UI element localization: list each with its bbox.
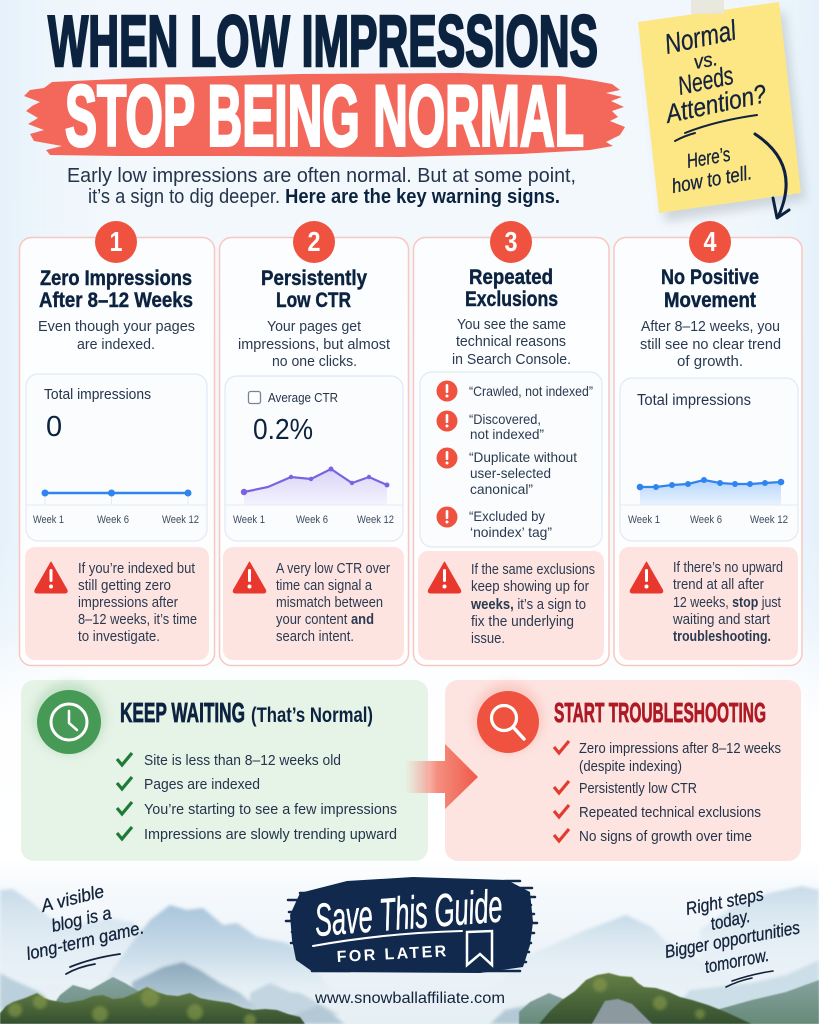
- line chart: flat impressions: Week 6: [690, 514, 722, 526]
- description: [452, 316, 571, 368]
- badge 2: 2: [308, 226, 320, 257]
- intro text: [67, 165, 576, 208]
- line chart: total impressions zero: 0: [46, 411, 62, 443]
- left handwritten note: blog is a: [49, 903, 113, 936]
- arrow: waiting to troubleshooting: [405, 744, 478, 809]
- panel: card 2: [220, 221, 408, 666]
- right handwritten note: tomorrow.: [703, 945, 771, 977]
- callout: impressions after: [78, 595, 178, 611]
- left handwritten note: A visible: [38, 881, 106, 916]
- callout: your content and: [276, 612, 374, 628]
- badge 2: [293, 221, 335, 263]
- callout: weeks, it’s a sign to: [470, 597, 586, 613]
- callout: [619, 547, 798, 660]
- line chart: average CTR: [225, 376, 403, 541]
- heading: KEEP WAITING: [120, 697, 245, 728]
- description: no one clicks.: [272, 353, 357, 370]
- icon: warning: [35, 562, 67, 593]
- heading: Exclusions: [465, 287, 558, 311]
- badge 1: 1: [110, 226, 122, 257]
- icon: warning: [233, 562, 266, 593]
- icon: alert: [436, 448, 458, 468]
- line chart: average CTR: 0.2%: [253, 414, 313, 446]
- description: technical reasons: [456, 333, 566, 350]
- callout: to investigate.: [78, 629, 160, 645]
- panel: start troubleshooting: [445, 680, 801, 861]
- heading: Movement: [664, 288, 756, 312]
- note handwriting: how to tell.: [670, 162, 754, 198]
- callout: [223, 547, 404, 660]
- exclusions list: “Crawled, not indexed”: [469, 383, 593, 399]
- save this guide brush banner: [286, 877, 537, 973]
- badge 1: [95, 221, 137, 263]
- icon: alert: [436, 506, 458, 528]
- callout: issue.: [471, 631, 505, 647]
- line chart: average CTR: Week 1: [233, 514, 265, 526]
- badge 3: [490, 221, 532, 263]
- callout: trend at all after: [673, 577, 764, 593]
- exclusions list: “Duplicate without: [469, 449, 577, 465]
- exclusions list: not indexed”: [470, 426, 544, 442]
- callout: troubleshooting.: [673, 629, 771, 645]
- note handwriting: [661, 14, 769, 198]
- heading: Low CTR: [276, 288, 351, 312]
- description: [640, 318, 781, 370]
- website url: www.snowballaffiliate.com: [314, 990, 505, 1007]
- badge 3: 3: [504, 226, 518, 257]
- exclusions list: “Discovered,: [469, 411, 541, 427]
- left handwritten note: [24, 881, 146, 974]
- icon: bookmark: [467, 931, 492, 965]
- checklist: [554, 740, 781, 845]
- callout: fix the underlying: [471, 614, 574, 630]
- icon: alert: [436, 380, 458, 402]
- description: impressions, but almost: [238, 336, 391, 353]
- note handwriting: Normal: [662, 14, 739, 60]
- description: in Search Console.: [452, 351, 571, 368]
- save this guide brush banner: Save This Guide: [313, 879, 504, 946]
- icon: clock: [33, 682, 105, 754]
- panel: keep waiting: [21, 680, 428, 861]
- note handwriting: Here’s: [685, 144, 732, 173]
- checklist: Zero impressions after 8–12 weeks: [579, 740, 781, 757]
- line chart: total impressions zero: Week 1: [33, 514, 64, 526]
- tape: [691, 0, 724, 14]
- icon: alert: [436, 410, 458, 432]
- icon: warning: [428, 562, 461, 593]
- exclusions list: user-selected: [470, 465, 551, 481]
- checklist: You’re starting to see a few impressions: [144, 801, 397, 818]
- right handwritten note: Right steps: [684, 884, 765, 919]
- icon: magnifier: [473, 683, 543, 753]
- mountain landscape: [0, 886, 819, 1024]
- heading: [39, 266, 193, 312]
- line chart: total impressions zero: Week 12: [162, 514, 199, 526]
- exclusions list: [420, 372, 602, 547]
- line chart: average CTR: Week 6: [296, 514, 328, 526]
- checklist: Impressions are slowly trending upward: [144, 826, 397, 843]
- callout: 8–12 weeks, it’s time: [78, 612, 197, 628]
- checklist: Persistently low CTR: [579, 780, 697, 797]
- panel: card 1: [20, 221, 214, 666]
- checklist: No signs of growth over time: [579, 828, 752, 845]
- line chart: flat impressions: Week 1: [628, 514, 660, 526]
- checklist: Site is less than 8–12 weeks old: [144, 752, 341, 769]
- note handwriting: Attention?: [661, 78, 769, 129]
- heading: No Positive: [661, 265, 759, 289]
- description: still see no clear trend: [640, 336, 781, 353]
- exclusions list: “Excluded by: [469, 508, 545, 524]
- line chart: total impressions zero: [26, 374, 207, 541]
- callout: If the same exclusions: [471, 562, 595, 578]
- intro text: Early low impressions are often normal. But at some point,: [67, 165, 576, 187]
- callout: [418, 551, 604, 660]
- right handwritten note: [663, 884, 801, 987]
- exclusions list: ‘noindex’ tag”: [470, 524, 552, 540]
- checklist: (despite indexing): [579, 758, 682, 775]
- note handwriting: Needs: [675, 60, 736, 101]
- intro text: it’s a sign to dig deeper. Here are the key warning signs.: [88, 186, 560, 208]
- checklist: Pages are indexed: [144, 776, 260, 793]
- line chart: total impressions zero: Total impressions: [44, 387, 151, 403]
- checklist: [117, 752, 397, 843]
- right handwritten note: today.: [709, 906, 752, 934]
- callout: [25, 547, 209, 660]
- line chart: flat impressions: Total impressions: [637, 392, 751, 409]
- heading: Repeated: [469, 265, 553, 289]
- callout: waiting and start: [672, 612, 770, 628]
- badge 4: 4: [704, 226, 717, 257]
- callout: search intent.: [276, 629, 354, 645]
- callout: 12 weeks, stop just: [673, 595, 781, 611]
- description: Your pages get: [267, 318, 362, 335]
- line chart: total impressions zero: Week 6: [97, 514, 129, 526]
- description: You see the same: [457, 316, 566, 333]
- left handwritten note: long-term game.: [24, 917, 146, 964]
- callout: mismatch between: [276, 595, 383, 611]
- callout: time can signal a: [276, 578, 373, 594]
- arrow from sticky note: [755, 134, 789, 218]
- exclusions list: canonical”: [470, 481, 533, 497]
- heading: [465, 265, 558, 311]
- description: [38, 318, 195, 353]
- sticky note: [638, 0, 806, 222]
- description: After 8–12 weeks, you: [641, 318, 780, 335]
- description: are indexed.: [77, 336, 155, 353]
- description: Even though your pages: [38, 318, 195, 335]
- save this guide brush banner: FOR LATER: [336, 943, 449, 966]
- heading: After 8–12 Weeks: [39, 288, 193, 312]
- heading: [261, 266, 367, 312]
- heading: Zero Impressions: [40, 266, 192, 290]
- callout: If there’s no upward: [673, 560, 783, 576]
- badge 4: [689, 221, 731, 263]
- callout: If you’re indexed but: [78, 561, 195, 577]
- line chart: average CTR: Average CTR: [268, 391, 338, 405]
- panel: card 4: [614, 221, 802, 666]
- line chart: flat impressions: [620, 378, 798, 541]
- heading: (That’s Normal): [251, 704, 373, 727]
- callout: keep showing up for: [471, 579, 589, 595]
- heading: Persistently: [261, 266, 367, 290]
- description: [238, 318, 391, 370]
- line chart: flat impressions: Week 12: [750, 514, 788, 526]
- description: of growth.: [677, 353, 743, 370]
- icon: warning: [630, 562, 663, 593]
- note handwriting: vs.: [692, 48, 720, 74]
- checklist: Repeated technical exclusions: [579, 804, 761, 821]
- callout: still getting zero: [78, 578, 171, 594]
- panel: card 3: [414, 221, 609, 666]
- callout: A very low CTR over: [276, 561, 390, 577]
- line chart: average CTR: Week 12: [357, 514, 394, 526]
- heading: [661, 265, 759, 312]
